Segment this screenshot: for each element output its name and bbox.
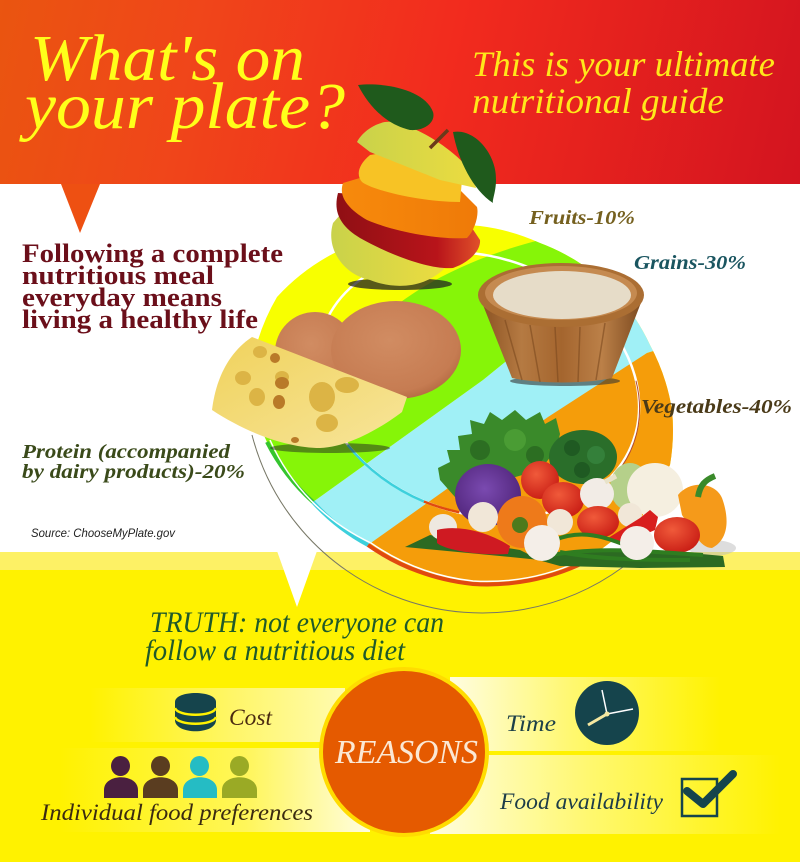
reasons circle: REASONS <box>334 734 478 771</box>
lettuce <box>438 410 560 497</box>
garlic top <box>580 476 616 510</box>
label: protein: by dairy products)-20% <box>22 461 245 483</box>
thin outer ring <box>252 435 623 613</box>
icon: people <box>104 756 257 798</box>
small red pepper <box>605 510 658 543</box>
icon: coins <box>175 693 216 731</box>
tomato top <box>521 461 559 499</box>
title <box>19 22 345 143</box>
red chili <box>437 528 510 554</box>
inner plate ring <box>279 208 677 562</box>
reason: food availability: Food availability <box>499 789 664 814</box>
truth statement: TRUTH: not everyone can <box>150 606 444 639</box>
orange pepper <box>497 496 547 548</box>
callout pointer from header <box>61 184 100 233</box>
reason: individual food preferences: Individual food preferences <box>40 800 313 825</box>
subtitle <box>472 44 775 121</box>
source note: Source: ChooseMyPlate.gov <box>31 526 176 540</box>
yellow lower panel <box>0 551 800 862</box>
icon: clock <box>575 681 639 745</box>
reason bands <box>60 677 780 834</box>
text: healthy meal message: living a healthy life <box>22 305 258 334</box>
icon: stacked fruit <box>331 84 496 290</box>
truth statement: follow a nutritious diet <box>145 634 406 667</box>
text: healthy meal message: everyday means <box>22 283 222 312</box>
person 2 <box>143 756 178 798</box>
subtitle: nutritional guide <box>472 81 724 121</box>
reasons circle <box>321 669 487 835</box>
garlic left <box>429 514 457 540</box>
leaf base <box>405 535 725 568</box>
label: grains: Grains-30% <box>634 252 746 274</box>
label: protein <box>21 441 245 483</box>
outer rim arcs <box>267 440 583 584</box>
inner ring coloured arcs <box>338 296 654 562</box>
plate chart <box>252 226 673 614</box>
reason: cost: Cost <box>229 705 273 730</box>
broccoli <box>549 430 617 484</box>
sector: fruits <box>258 226 673 548</box>
text: healthy meal message <box>22 239 283 334</box>
text: healthy meal message: Following a complete <box>22 239 283 268</box>
tomato right <box>654 517 700 553</box>
truth statement <box>145 606 444 667</box>
reason: time: Time <box>506 711 556 736</box>
tomato middle <box>577 506 619 538</box>
title: What's on <box>30 22 305 95</box>
mushrooms <box>468 502 642 535</box>
shadow <box>688 540 736 556</box>
garlic bottom <box>524 525 654 561</box>
label: fruits: Fruits-10% <box>528 207 635 229</box>
cauliflower <box>610 463 683 517</box>
tomato vine <box>542 482 584 518</box>
yellow-orange pepper <box>678 476 727 548</box>
icon: checkbox <box>682 774 733 816</box>
icon: rice bowl <box>478 263 644 386</box>
icon: eggs <box>275 301 461 399</box>
text: healthy meal message: nutritious meal <box>22 261 214 290</box>
green beans <box>540 535 703 560</box>
label: vegetables: Vegetables-40% <box>641 396 792 418</box>
label: protein: Protein (accompanied <box>21 441 231 463</box>
title: your plate? <box>19 70 345 143</box>
icon: cheese <box>212 337 407 453</box>
header banner <box>0 0 800 184</box>
person 3 <box>183 756 217 798</box>
icon: vegetables <box>405 410 736 568</box>
sector: grains <box>313 318 653 545</box>
purple cabbage <box>455 464 521 526</box>
person 1 <box>104 756 138 798</box>
sector: vegetables <box>368 351 673 582</box>
sector: protein <box>264 241 582 502</box>
person 4 <box>222 756 257 798</box>
subtitle: This is your ultimate <box>472 44 775 84</box>
